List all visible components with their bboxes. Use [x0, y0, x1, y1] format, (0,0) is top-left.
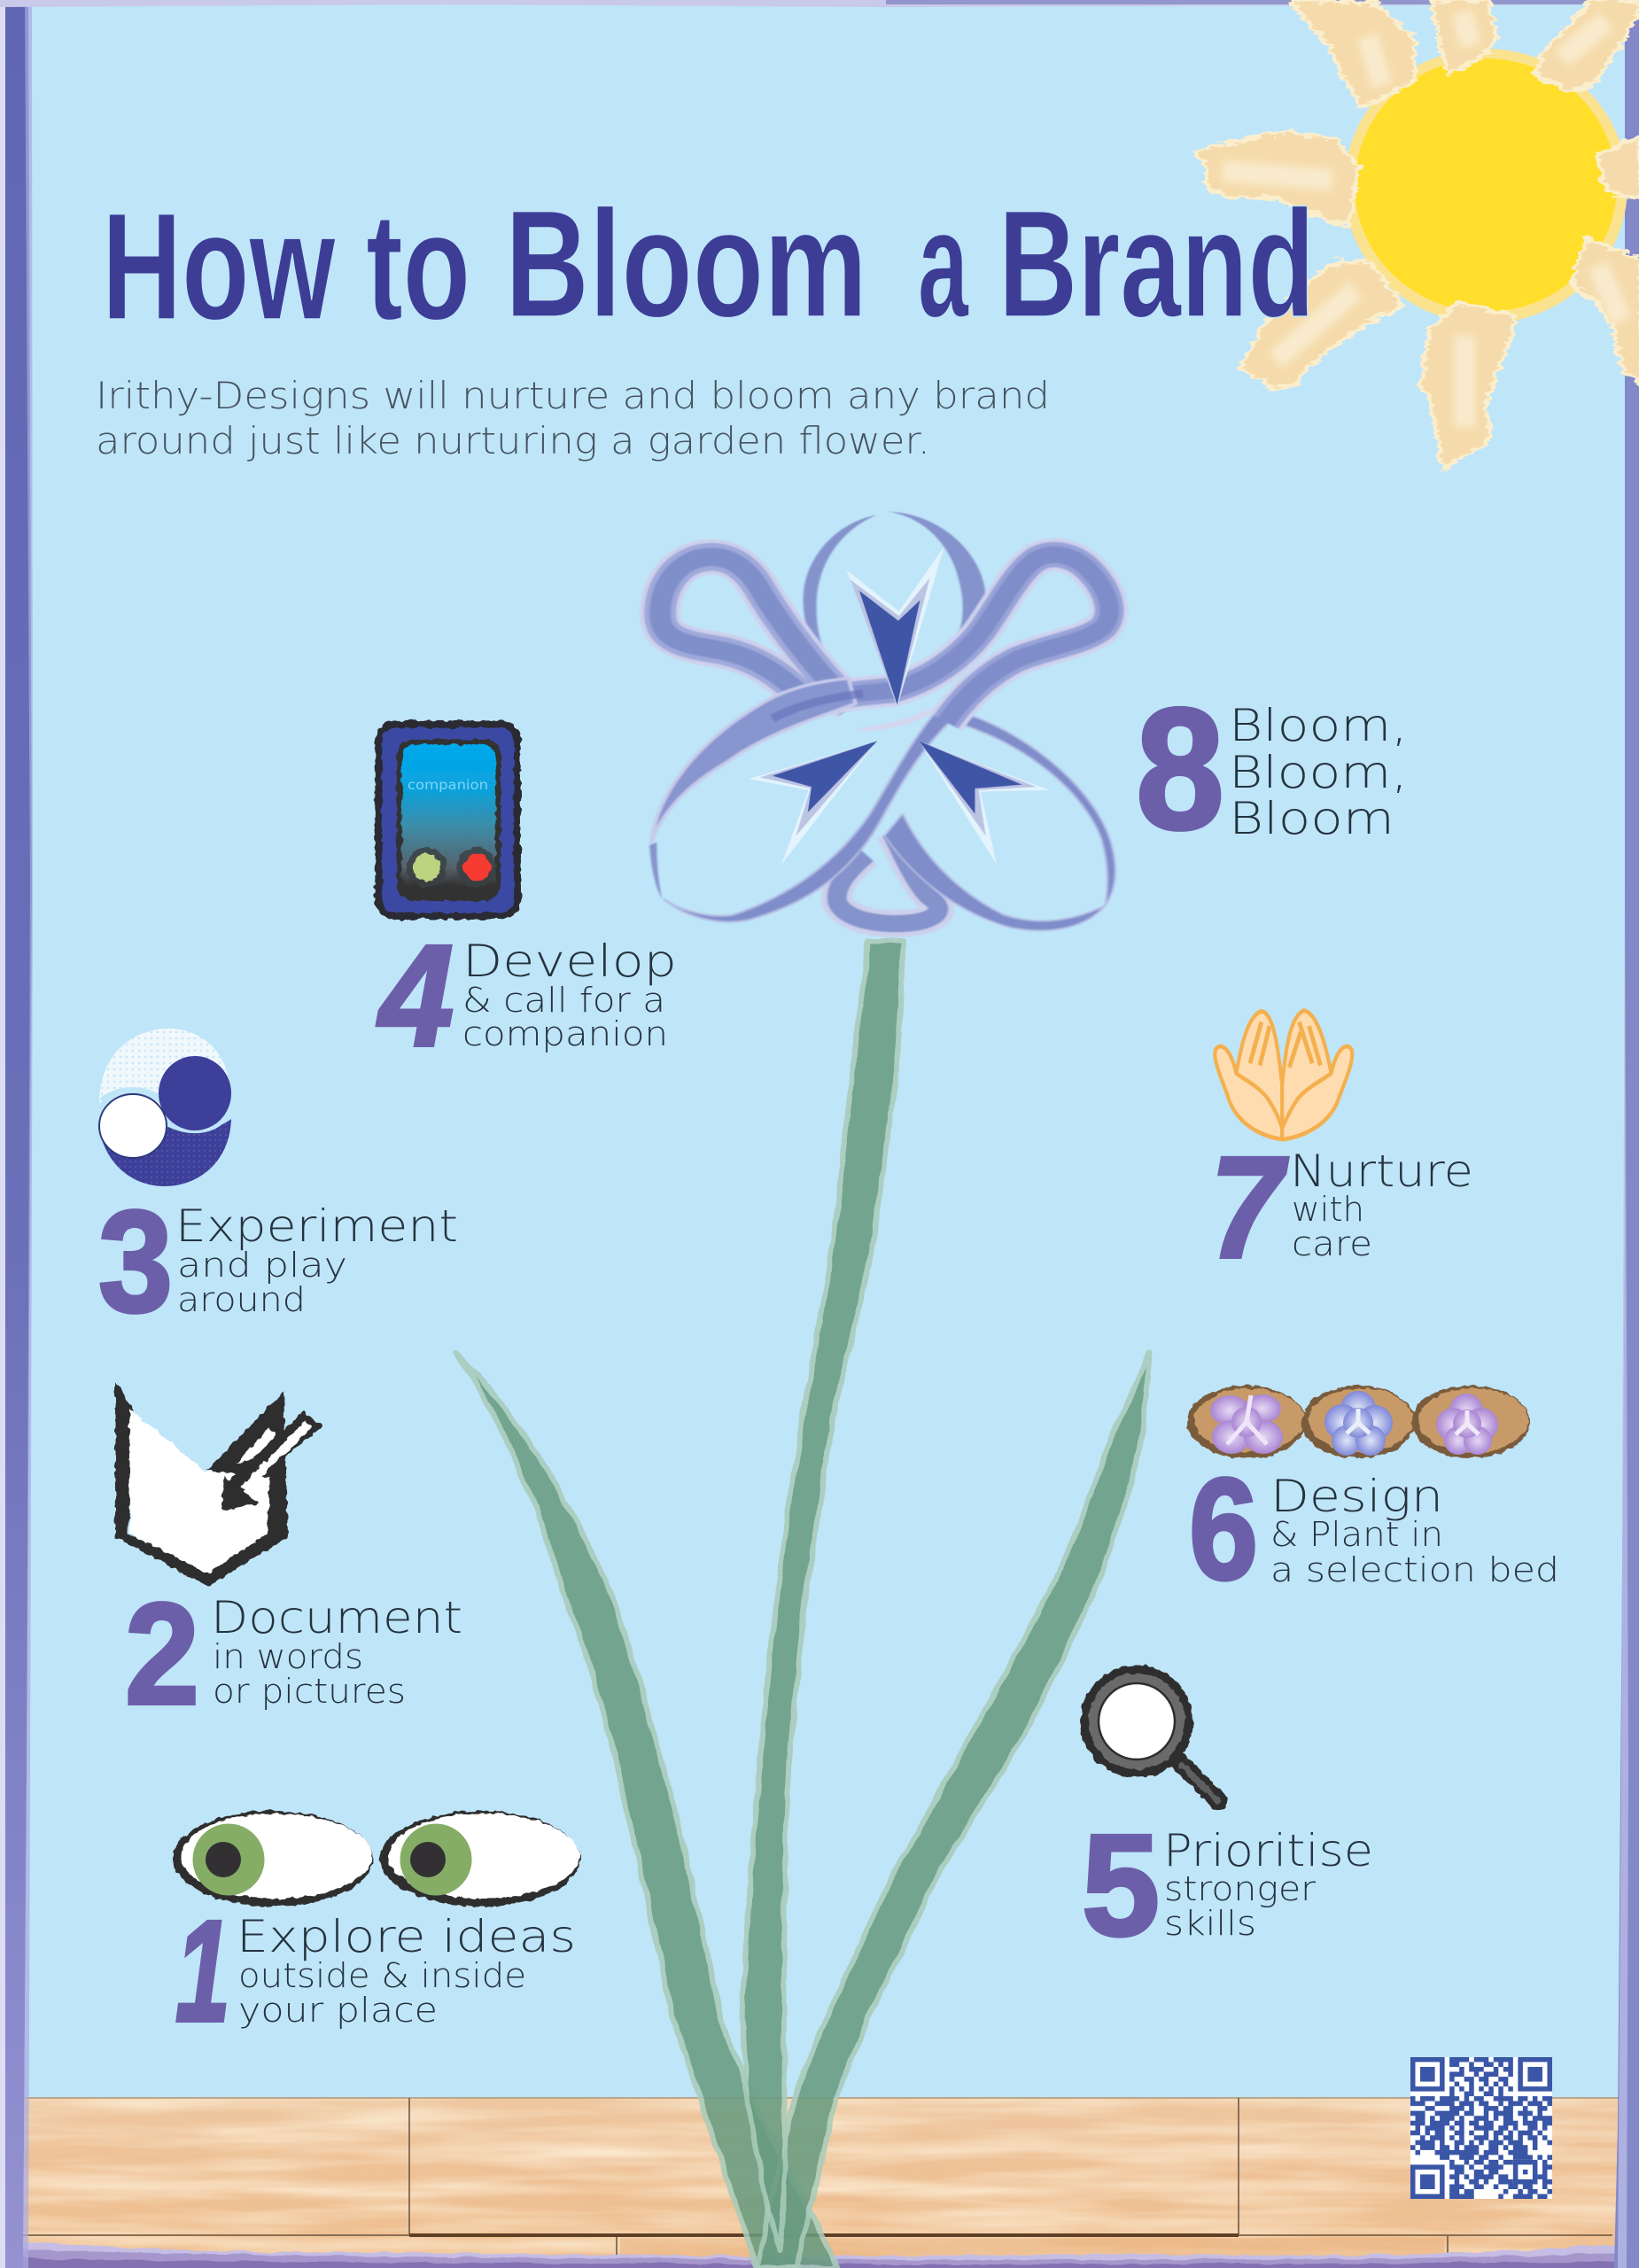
- title: How to: [102, 182, 470, 352]
- sun disc: [1344, 49, 1627, 323]
- step 8 text: Bloom,: [1229, 700, 1408, 751]
- title: Brand: [998, 179, 1315, 349]
- icon: yin-yang circles: [99, 1029, 231, 1186]
- step 3: experiment: [98, 1029, 458, 1342]
- step 6: design: [1187, 1386, 1559, 1610]
- wave taper toward lower left: [651, 679, 856, 843]
- bed 2: [1301, 1386, 1415, 1458]
- numeral 3: 3: [98, 1180, 173, 1342]
- left arrowhead: [749, 741, 877, 865]
- step 1 text: [237, 1911, 576, 2030]
- step 2: document: [115, 1380, 462, 1735]
- flower: [649, 511, 1115, 930]
- step 7: nurture: [1210, 1011, 1473, 1288]
- step 8: bloom: [1136, 672, 1408, 866]
- right arrowhead: [919, 741, 1049, 865]
- step 7 text: Nurture: [1290, 1146, 1473, 1197]
- sun rays: [1194, 0, 1639, 469]
- bed 3: [1411, 1386, 1530, 1458]
- step 1 text: Explore ideas: [237, 1911, 576, 1962]
- lower right petal: [884, 716, 1115, 930]
- ribbon down to lower left petal: [664, 694, 986, 922]
- top arrowhead: [847, 547, 944, 707]
- title: a: [918, 179, 969, 349]
- step 3 text: and play: [177, 1246, 347, 1285]
- bottom small loop: [837, 833, 938, 924]
- subtitle: [96, 374, 1050, 462]
- step 5 text: Prioritise: [1163, 1825, 1373, 1876]
- centre stem: [742, 941, 904, 2250]
- step 7 text: care: [1292, 1224, 1372, 1263]
- right leaf: [757, 1353, 1150, 2268]
- subtitle: around just like nurturing a garden flower.: [96, 419, 930, 462]
- step 8 text: Bloom: [1229, 793, 1394, 844]
- QR code: [1410, 2057, 1552, 2199]
- bed 1: [1187, 1386, 1306, 1458]
- plant stem and leaves: [455, 941, 1150, 2268]
- numeral 8: 8: [1136, 672, 1224, 866]
- step 3 text: [175, 1200, 458, 1319]
- icon: magnifying glass: [1084, 1669, 1219, 1802]
- top petal: [804, 511, 986, 668]
- step 4 text: Develop: [462, 936, 677, 987]
- step 4 text: [462, 936, 677, 1053]
- step 6 text: [1270, 1471, 1559, 1589]
- numeral 1: 1: [175, 1890, 230, 2052]
- icon: cupped hands: [1215, 1011, 1352, 1139]
- purple ground band: [0, 2240, 1639, 2268]
- icon: right eye: [380, 1811, 580, 1907]
- subtitle: Irithy-Designs will nurture and bloom any brand: [96, 374, 1050, 417]
- step 4 text: companion: [462, 1014, 668, 1053]
- step 2 text: [211, 1592, 462, 1711]
- left leaf: [455, 1353, 837, 2268]
- numeral 4: 4: [377, 914, 454, 1076]
- icon: left eye: [173, 1811, 373, 1907]
- lower left petal and wave ribbon: [649, 555, 1109, 922]
- step 6 text: Design: [1270, 1471, 1443, 1522]
- step 2 text: in words: [213, 1637, 363, 1676]
- step 3 text: around: [177, 1280, 306, 1319]
- step 4 text: & call for a: [462, 981, 665, 1020]
- step 5 text: stronger: [1164, 1869, 1316, 1908]
- title: [102, 179, 1315, 352]
- wooden floor: [0, 2097, 1639, 2268]
- arrowhead petal markers: [749, 547, 1049, 865]
- left thick petal: [660, 557, 852, 712]
- step 8 text: Bloom,: [1229, 747, 1408, 798]
- title: Bloom: [505, 179, 867, 349]
- step 6 text: & Plant in: [1270, 1515, 1443, 1554]
- numeral 7: 7: [1210, 1126, 1289, 1288]
- step 4: develop: [377, 724, 677, 1076]
- icon: note with pen: [115, 1380, 322, 1587]
- step 2 text: Document: [211, 1592, 462, 1643]
- step 5: prioritise: [1082, 1669, 1373, 1966]
- step 1 text: outside & inside: [238, 1956, 526, 1995]
- step 2 text: or pictures: [213, 1672, 406, 1711]
- step 6 text: a selection bed: [1270, 1550, 1559, 1589]
- step 7 text: [1290, 1146, 1473, 1263]
- step 8 text: [1229, 700, 1408, 844]
- icon: phone: [378, 724, 517, 916]
- wave into right loop: [776, 555, 1109, 722]
- step 3 text: Experiment: [175, 1200, 458, 1252]
- step 7 text: with: [1292, 1190, 1364, 1229]
- step 5 text: skills: [1164, 1904, 1256, 1943]
- sun: [1194, 0, 1639, 469]
- numeral 2: 2: [125, 1573, 199, 1735]
- numeral 5: 5: [1082, 1804, 1160, 1966]
- icon: flower beds: [1187, 1386, 1530, 1458]
- step 1: explore: [173, 1811, 580, 2052]
- numeral 6: 6: [1189, 1448, 1258, 1610]
- step 1 text: your place: [238, 1991, 438, 2030]
- step 5 text: [1163, 1825, 1373, 1943]
- icon: phone: companion: [408, 777, 488, 793]
